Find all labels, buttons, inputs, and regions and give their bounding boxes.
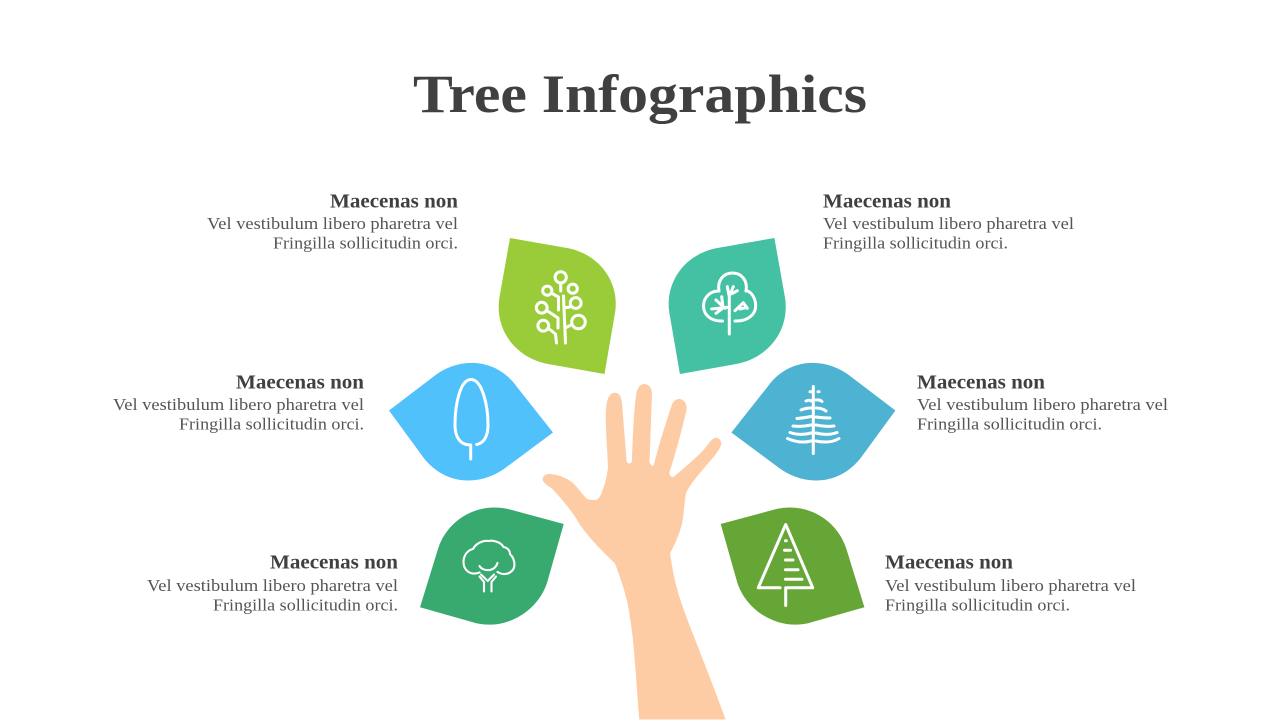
icon: triangular pine (758, 524, 813, 606)
icon: bushy tree (464, 541, 514, 592)
text block: middle right (917, 372, 1168, 433)
text block: bottom right: Vel vestibulum libero pharetra vel (885, 576, 1136, 595)
leaf shape: lime (499, 238, 616, 374)
panel: top left leaf (499, 238, 616, 374)
text block: bottom right: Maecenas non (885, 552, 1013, 573)
text block: top left: Vel vestibulum libero pharetra vel (207, 214, 458, 233)
text block: bottom left: Maecenas non (270, 552, 398, 573)
text block: middle left: Fringilla sollicitudin orci. (179, 414, 364, 433)
text block: bottom left (147, 552, 398, 614)
text block: middle left (113, 372, 364, 433)
text block: top left (207, 191, 458, 252)
text block: top right: Vel vestibulum libero pharetra vel (823, 214, 1074, 233)
leaf shape: steel blue (731, 363, 895, 481)
text block: bottom left: Vel vestibulum libero pharetra vel (147, 576, 398, 595)
panel: middle left leaf (389, 363, 553, 481)
text block: bottom right: Fringilla sollicitudin orci. (885, 595, 1070, 614)
panel: bottom left leaf (420, 507, 564, 625)
text block: middle right: Vel vestibulum libero pharetra vel (917, 395, 1168, 414)
panel: top right leaf (669, 238, 786, 374)
text block: top right (823, 191, 1074, 252)
leaf shape: grass green (721, 507, 864, 625)
text block: bottom left: Fringilla sollicitudin orci. (213, 595, 398, 614)
icon: fir tree with arching branches (788, 386, 839, 454)
text block: middle right: Maecenas non (917, 372, 1045, 393)
text block: middle left: Vel vestibulum libero pharetra vel (113, 395, 364, 414)
leaf shape: sky blue (389, 363, 553, 481)
text block: middle left: Maecenas non (236, 372, 364, 393)
icon: oval tree (455, 380, 488, 459)
text block: bottom right (885, 552, 1136, 614)
leaf shape: teal (669, 238, 786, 374)
text block: top right: Maecenas non (823, 191, 951, 212)
leaf shape: emerald (420, 507, 564, 625)
text block: top left: Maecenas non (330, 191, 458, 212)
title: Tree Infographics (413, 64, 867, 124)
hand and arm (543, 384, 726, 720)
icon: round tree (704, 273, 756, 334)
icon: branching tree with circles (536, 272, 585, 343)
panel: bottom right leaf (721, 507, 864, 625)
text block: top left: Fringilla sollicitudin orci. (273, 233, 458, 252)
text block: top right: Fringilla sollicitudin orci. (823, 233, 1008, 252)
text block: middle right: Fringilla sollicitudin orci. (917, 414, 1102, 433)
panel: middle right leaf (731, 363, 895, 481)
